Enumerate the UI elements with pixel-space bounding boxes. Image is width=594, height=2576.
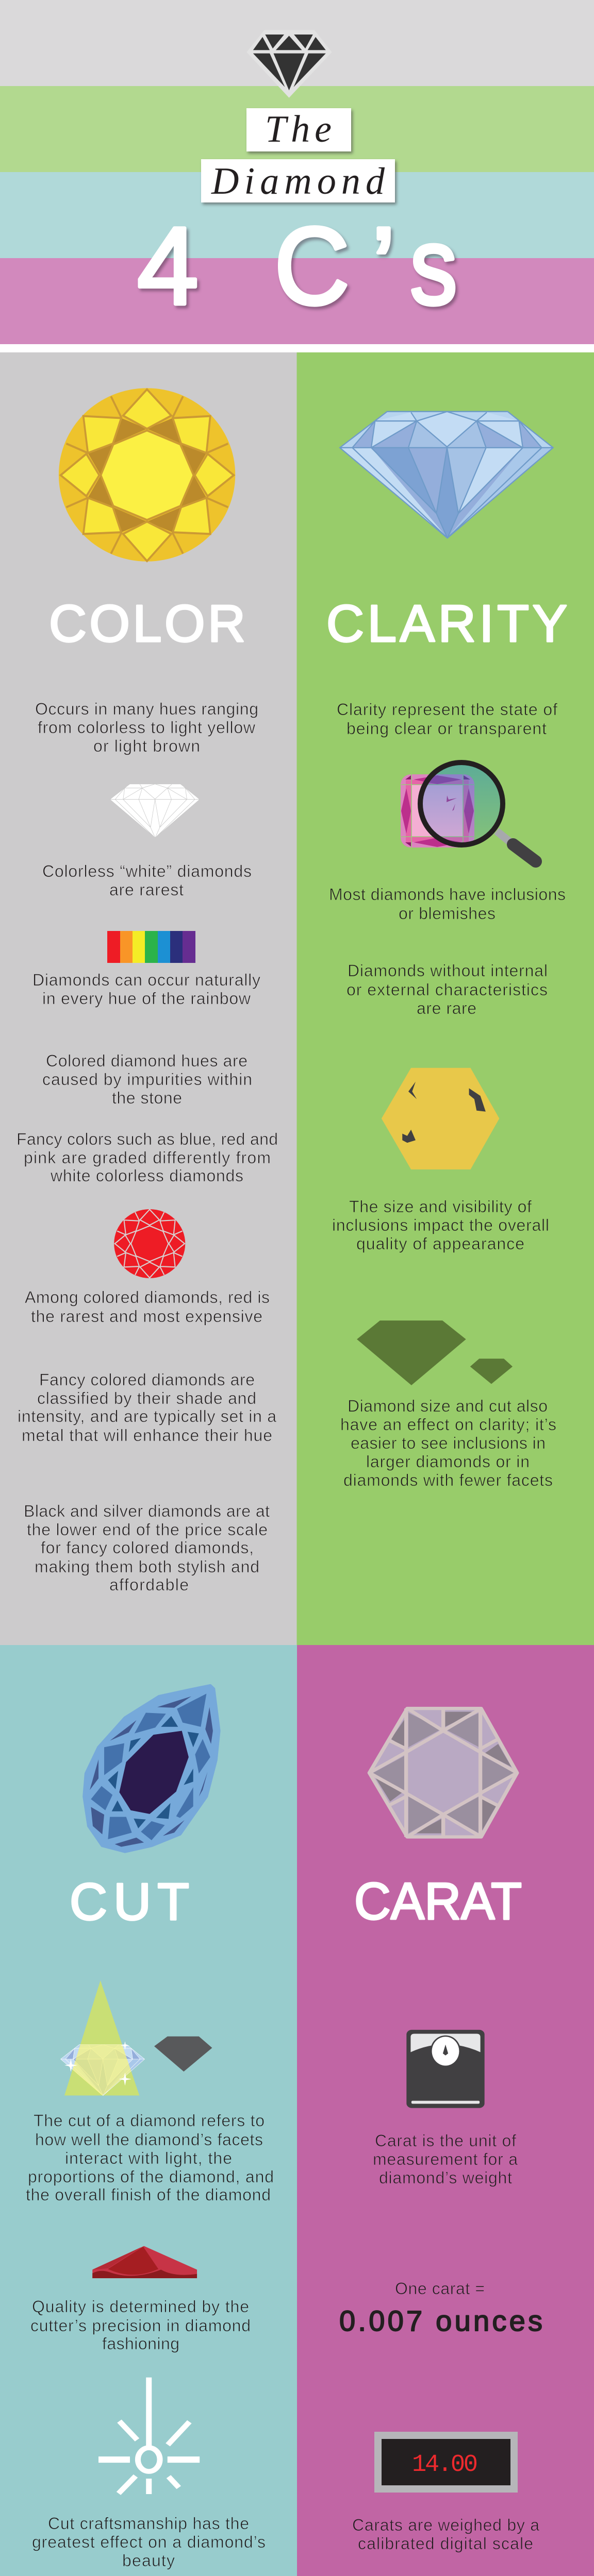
text: black and silver: making them both stylish and: [35, 1557, 259, 1576]
title: 4 C's: C: [274, 205, 350, 328]
heading: CARAT: CARAT: [354, 1873, 522, 1930]
text: quality: Quality is determined by the: [32, 2297, 249, 2316]
text: fancy colors: [16, 1130, 278, 1185]
text: size and visibility: inclusions impact the overall: [332, 1216, 549, 1234]
text: cut definition: the overall finish of the diamond: [26, 2185, 271, 2204]
panel: cut: [0, 1645, 297, 2576]
icon: blue pear diamond: [84, 1685, 219, 1852]
text: rainbow: in every hue of the rainbow: [42, 989, 251, 1008]
text: black and silver: for fancy colored diamonds,: [41, 1538, 254, 1557]
icon: magnifying glass over pink gem: [401, 762, 536, 861]
icon: two green diamonds: [357, 1320, 513, 1385]
text: size and cut: [340, 1397, 556, 1489]
icon: digital scale display: 14.00: [412, 2451, 478, 2479]
icon: light burst: [98, 2378, 200, 2494]
text: fancy colors: white colorless diamonds: [50, 1166, 243, 1185]
text: craftsmanship: [32, 2514, 266, 2570]
heading: COLOR: COLOR: [49, 595, 245, 653]
text: classified: intensity, and are typically set in a: [18, 1407, 276, 1426]
text: black and silver: Black and silver diamonds are at: [24, 1502, 270, 1520]
text: classified: Fancy colored diamonds are: [39, 1370, 255, 1389]
text: impurities: [42, 1052, 252, 1107]
text: size and cut: Diamond size and cut also: [348, 1397, 548, 1415]
text: size and cut: have an effect on clarity; it’s: [340, 1415, 556, 1434]
text: hues: Occurs in many hues ranging: [35, 700, 258, 718]
icon: diamond in light beam beside dark diamond: [61, 1980, 212, 2095]
title: 4 C's: ’: [371, 205, 396, 328]
icon: digital scale display: [374, 2432, 518, 2493]
text: size and cut: easier to see inclusions in: [351, 1434, 546, 1452]
text: colorless: Colorless “white” diamonds: [42, 862, 252, 880]
icon: yellow round diamond: [59, 388, 235, 562]
panel: color: [0, 352, 297, 1645]
text: black and silver: [24, 1502, 270, 1594]
text: craftsmanship: beauty: [122, 2551, 175, 2570]
heading: CUT: CUT: [70, 1873, 189, 1931]
text: fancy colors: pink are graded differently from: [24, 1148, 271, 1167]
icon: yellow hexagon with inclusions: [382, 1068, 499, 1170]
text: digital scale: Carats are weighed by a: [352, 2516, 539, 2534]
text: unit of measurement: measurement for a: [373, 2150, 518, 2168]
text: digital scale: calibrated digital scale: [358, 2534, 533, 2553]
heading: CLARITY: CLARITY: [326, 595, 567, 653]
text: cut definition: proportions of the diamond, and: [28, 2167, 274, 2186]
text: impurities: the stone: [112, 1089, 182, 1107]
text: classified: classified by their shade and: [37, 1389, 256, 1408]
text: rare: or external characteristics: [346, 980, 548, 999]
text: rare: are rare: [417, 999, 476, 1018]
text: size and visibility: quality of appearance: [356, 1234, 524, 1253]
text: one carat: One carat =: [395, 2279, 485, 2298]
text: quality: [30, 2297, 251, 2353]
icon: hexagon gem: [369, 1708, 517, 1837]
text: black and silver: the lower end of the price scale: [27, 1520, 268, 1539]
title: The: [246, 108, 351, 151]
icon: weighing scale: [406, 2030, 485, 2108]
text: rare: [346, 961, 548, 1018]
panel: carat: [297, 1645, 594, 2576]
text: cut definition: how well the diamond’s facets: [35, 2130, 263, 2149]
text: red rarest: [25, 1288, 270, 1326]
icon: red diamond: [114, 1209, 185, 1278]
text: cut definition: interact with light, the: [65, 2149, 232, 2167]
text: rainbow: [32, 971, 260, 1008]
text: quality: fashioning: [102, 2334, 179, 2353]
text: black and silver: affordable: [109, 1575, 189, 1594]
text: impurities: Colored diamond hues are: [46, 1052, 248, 1070]
title: The: The: [265, 108, 332, 150]
text: inclusions: Most diamonds have inclusions: [329, 885, 566, 904]
text: colorless: are rarest: [109, 880, 184, 899]
icon: top diamond: [246, 30, 332, 98]
text: classified: [18, 1370, 276, 1445]
stat: 0.007 ounces: 0.007 ounces: [339, 2304, 542, 2337]
text: unit of measurement: Carat is the unit of: [375, 2131, 516, 2150]
text: quality: cutter’s precision in diamond: [30, 2316, 251, 2335]
text: colorless: [42, 862, 252, 899]
icon: blue diamond: [340, 412, 553, 538]
text: craftsmanship: greatest effect on a diamond’s: [32, 2533, 266, 2551]
text: hues: from colorless to light yellow: [38, 718, 256, 737]
text: inclusions: or blemishes: [399, 904, 496, 923]
icon: rainbow: [107, 931, 195, 963]
text: hues: or light brown: [93, 737, 200, 755]
text: inclusions: [329, 885, 566, 923]
text: rare: Diamonds without internal: [348, 961, 548, 980]
text: impurities: caused by impurities within: [42, 1070, 252, 1089]
text: red rarest: Among colored diamonds, red is: [25, 1288, 270, 1307]
text: cut definition: The cut of a diamond refers to: [34, 2111, 265, 2130]
text: digital scale: [352, 2516, 539, 2553]
icon: white diamond: [110, 784, 200, 838]
text: unit of measurement: [373, 2131, 518, 2187]
title: 4 C's: s: [410, 205, 457, 328]
title: 4 C's: 4: [137, 205, 199, 328]
title: Diamond: Diamond: [211, 160, 385, 202]
text: size and visibility: [332, 1197, 549, 1253]
text: hues: [35, 700, 258, 755]
text: clear or transparent: Clarity represent the state of: [337, 700, 557, 719]
text: unit of measurement: diamond’s weight: [379, 2168, 512, 2187]
text: red rarest: the rarest and most expensive: [31, 1307, 262, 1326]
text: clear or transparent: being clear or transparent: [346, 719, 547, 738]
text: fancy colors: Fancy colors such as blue, red and: [16, 1130, 278, 1148]
header: title banner: [0, 0, 594, 344]
text: craftsmanship: Cut craftsmanship has the: [48, 2514, 249, 2533]
text: clear or transparent: [337, 700, 557, 738]
text: classified: metal that will enhance their hue: [22, 1426, 272, 1445]
icon: red gem: [92, 2246, 197, 2278]
panel: clarity: [297, 352, 594, 1645]
text: size and cut: larger diamonds or in: [366, 1452, 530, 1471]
text: size and cut: diamonds with fewer facets: [343, 1471, 553, 1489]
text: rainbow: Diamonds can occur naturally: [32, 971, 260, 989]
text: size and visibility: The size and visibility of: [349, 1197, 532, 1216]
text: cut definition: [26, 2111, 274, 2204]
